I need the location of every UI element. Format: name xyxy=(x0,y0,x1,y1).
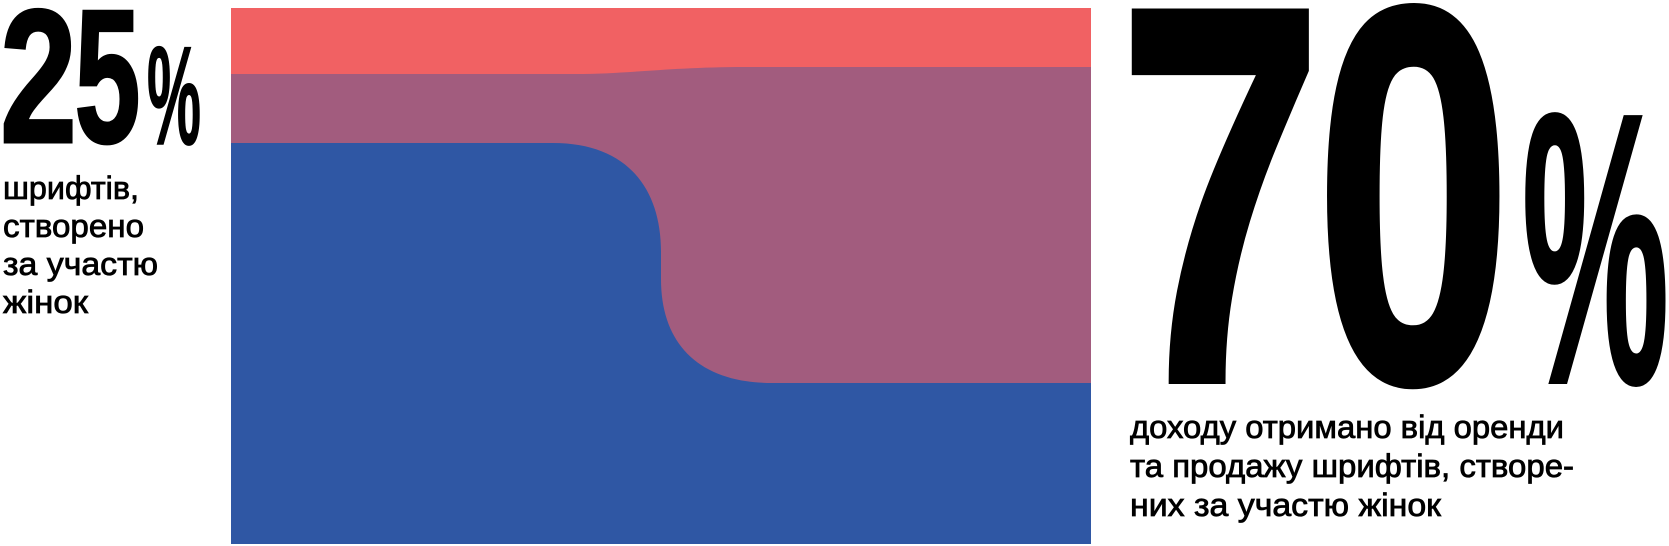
panel: left statistic 25% xyxy=(0,0,201,320)
caption: left: жінок xyxy=(3,284,89,320)
caption: right: та продажу шрифтів, створе- xyxy=(1130,448,1574,484)
area: red top band xyxy=(231,8,1091,74)
caption: left: за участю xyxy=(3,246,158,282)
caption: right: доходу отримано від оренди xyxy=(1130,409,1564,445)
text: % xyxy=(147,17,201,174)
caption: left: створено xyxy=(3,208,144,244)
chart: stacked area flow xyxy=(231,8,1091,544)
caption: right: них за участю жінок xyxy=(1130,487,1442,523)
caption: right xyxy=(1130,409,1574,523)
caption: left xyxy=(3,170,158,320)
caption: left: шрифтів, xyxy=(3,170,139,206)
panel: right statistic 70% xyxy=(1118,0,1669,523)
area: purple middle band xyxy=(231,8,1091,383)
area: blue base xyxy=(231,8,1091,544)
